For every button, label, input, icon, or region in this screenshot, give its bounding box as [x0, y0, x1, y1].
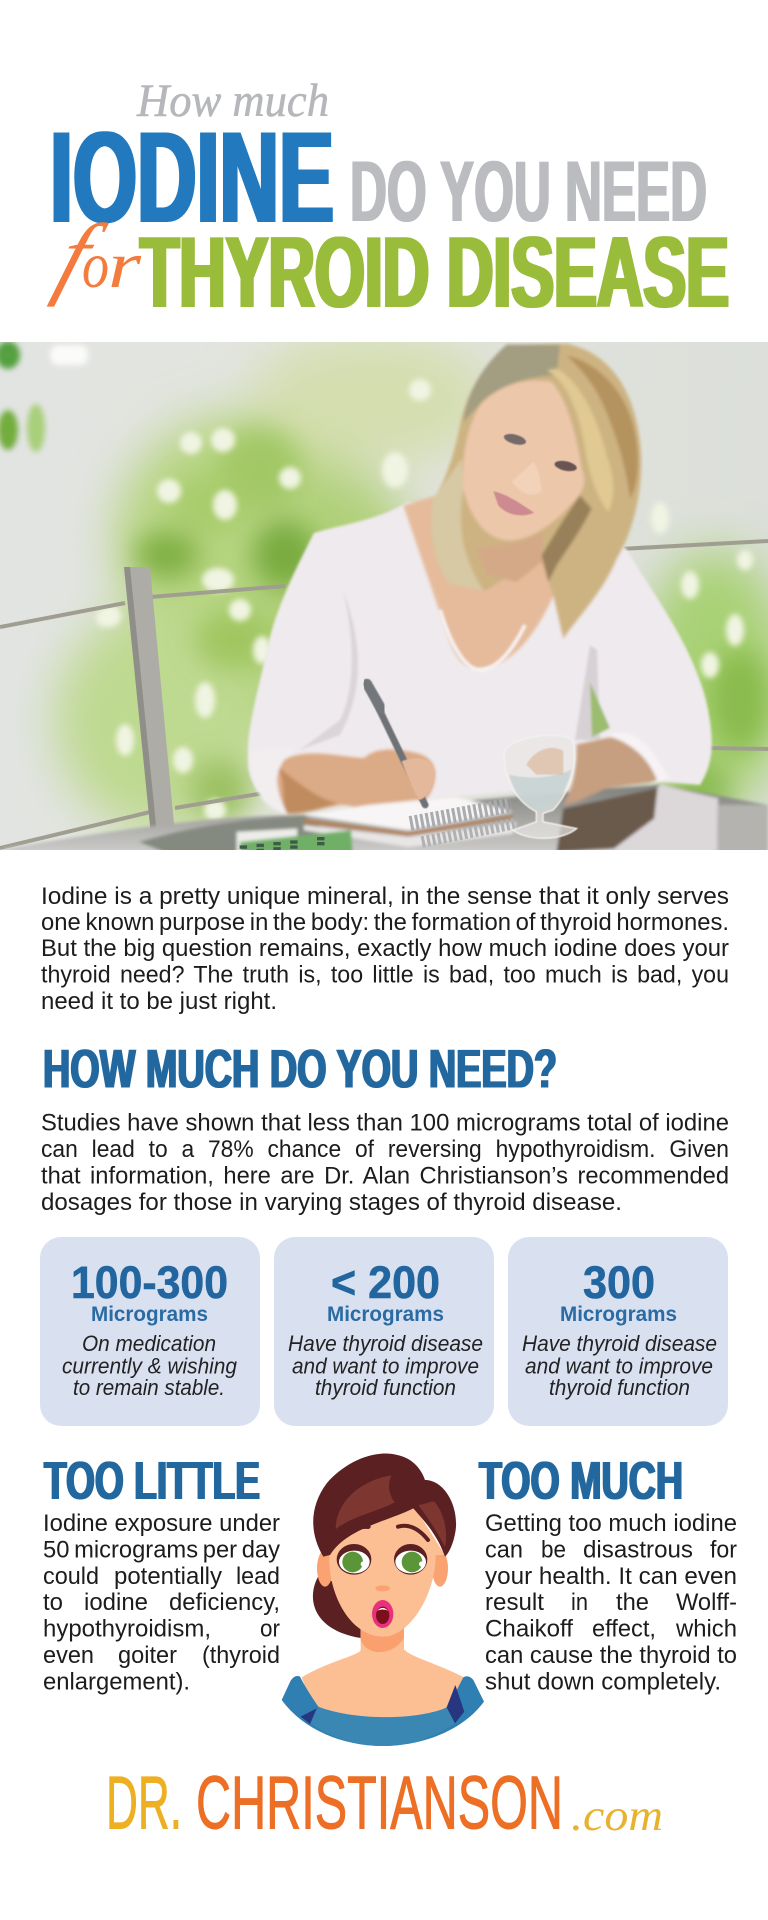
- studies paragraph: dosages for those in varying stages of thyroid disease.: [41, 1189, 622, 1216]
- left cuff: [253, 758, 288, 814]
- text block: too much: be: [541, 1536, 566, 1564]
- title line: How much: How much: [136, 75, 329, 127]
- woman: neckline trim: [440, 610, 525, 670]
- text block: too much: which: [675, 1616, 737, 1642]
- leaves top left: [0, 341, 88, 452]
- logo: DR. CHRISTIANSON.com: DR.: [106, 1760, 182, 1844]
- intro paragraph: Iodine is a pretty unique mineral, in the sense that it only serves: [41, 883, 729, 910]
- gap between body and sleeve: [590, 682, 610, 737]
- woman: shirt: [248, 502, 712, 812]
- text block: too much: can: [485, 1536, 523, 1564]
- panel: 100-300 micrograms: currently & wishing: [62, 1354, 237, 1378]
- panel: 300 micrograms: Micrograms: [560, 1303, 677, 1326]
- title word: for: f: [45, 206, 115, 307]
- railing: [0, 541, 768, 848]
- intro paragraph: [41, 883, 729, 1015]
- panel: less than 200 micrograms: thyroid function: [315, 1375, 456, 1400]
- panel: less than 200 micrograms: [274, 1237, 494, 1426]
- eyebrows: [338, 1527, 368, 1539]
- panel: 100-300 micrograms: 100-300: [71, 1257, 228, 1308]
- panel: 300 micrograms: thyroid function: [549, 1375, 690, 1400]
- mouth: [372, 1600, 393, 1628]
- panel: 300 micrograms: 300: [583, 1257, 655, 1308]
- text block: too little: hypothyroidism,: [43, 1616, 211, 1642]
- text block: too much: result: [485, 1589, 544, 1616]
- panel: 300 micrograms: Have thyroid disease: [522, 1331, 717, 1356]
- panel: 100-300 micrograms: On medication: [82, 1331, 216, 1356]
- panel: 300 micrograms: and want to improve: [525, 1354, 713, 1378]
- studies paragraph: that information, here are Dr. Alan Christianson’s recommended: [41, 1162, 729, 1190]
- text block: too much: can cause the thyroid to: [485, 1642, 737, 1669]
- text block: too little: potentially: [114, 1563, 223, 1590]
- text block: too little: iodine: [84, 1589, 148, 1616]
- text block: too much: [485, 1510, 737, 1696]
- text block: too little: enlargement).: [43, 1668, 190, 1696]
- text block: too much: Chaikoff: [485, 1616, 573, 1642]
- text block: too much: for: [710, 1536, 737, 1564]
- panel: less than 200 micrograms: and want to improve: [292, 1354, 479, 1378]
- foliage background: [55, 335, 768, 835]
- intro paragraph: need it to be just right.: [41, 988, 277, 1015]
- text block: too little: [43, 1510, 281, 1696]
- logo: DR. CHRISTIANSON.com: .com: [571, 1791, 663, 1840]
- text block: too little: 50 micrograms per day: [43, 1536, 281, 1564]
- text block: too little: or: [260, 1616, 280, 1642]
- text block: too little: to: [43, 1589, 63, 1616]
- text block: too much: disastrous: [583, 1536, 693, 1564]
- woman: arms, hands and table: [4, 684, 768, 855]
- hair: [313, 1454, 456, 1557]
- studies paragraph: can lead to a 78% chance of reversing hypothyroidism. Given: [41, 1136, 729, 1163]
- text block: too much: shut down completely.: [485, 1668, 721, 1696]
- text block: too much: effect,: [592, 1616, 656, 1642]
- text block: too little: even: [43, 1642, 94, 1669]
- text block: too little: (thyroid: [202, 1642, 280, 1669]
- text block: too little: goiter: [118, 1642, 177, 1669]
- face: [329, 1505, 445, 1637]
- logo: DR. CHRISTIANSON.com: CHRISTIANSON: [196, 1760, 563, 1844]
- railing post: [124, 567, 175, 835]
- photo: woman writing at a table: [0, 335, 768, 855]
- heading: too little: TOO LITTLE: [44, 1452, 260, 1511]
- calculator: [240, 830, 353, 853]
- panel: less than 200 micrograms: Have thyroid disease: [288, 1331, 483, 1356]
- woman: head, hair and chest: [403, 344, 641, 669]
- neck: [361, 1607, 404, 1652]
- pen: [367, 684, 425, 805]
- panel: 100-300 micrograms: to remain stable.: [73, 1375, 225, 1400]
- studies paragraph: Studies have shown that less than 100 micrograms total of iodine: [41, 1110, 729, 1136]
- panel: 100-300 micrograms: Micrograms: [91, 1303, 208, 1326]
- title word: for: o: [82, 229, 109, 302]
- right eye: [394, 1544, 427, 1575]
- panel: 300 micrograms: [508, 1237, 728, 1426]
- text block: too little: Iodine exposure under: [43, 1510, 280, 1537]
- text block: too much: in: [571, 1589, 588, 1616]
- text block: too little: lead: [236, 1563, 280, 1590]
- intro paragraph: thyroid need? The truth is, too little is bad, too much is bad, you: [41, 962, 729, 988]
- dress: [282, 1676, 484, 1746]
- title: [45, 75, 729, 329]
- right forearm and hand: [563, 736, 658, 805]
- water glass: [509, 747, 578, 840]
- panel: less than 200 micrograms: < 200: [331, 1257, 440, 1308]
- ears: [317, 1550, 333, 1587]
- panel: less than 200 micrograms: Micrograms: [327, 1303, 444, 1326]
- table: [4, 785, 768, 855]
- text block: too much: the: [616, 1589, 649, 1616]
- intro paragraph: one known purpose in the body: the formation of thyroid hormones.: [41, 909, 729, 936]
- text block: too much: Getting too much iodine: [485, 1510, 737, 1537]
- panel: 100-300 micrograms: [40, 1237, 260, 1426]
- studies paragraph: [41, 1110, 729, 1216]
- text block: too little: deficiency,: [169, 1589, 280, 1616]
- title word: IODINE: IODINE: [50, 104, 334, 250]
- title word: for: [45, 206, 141, 307]
- heading: too much: TOO MUCH: [479, 1452, 683, 1511]
- intro paragraph: But the big question remains, exactly how much iodine does your: [41, 935, 729, 962]
- fingers over pen: [402, 758, 435, 800]
- nose: [375, 1585, 390, 1591]
- text block: too much: your health. It can even: [485, 1563, 737, 1590]
- left forearm and hand: [277, 749, 435, 815]
- shoulders: [302, 1650, 464, 1722]
- bun: [313, 1573, 361, 1638]
- left eye: [337, 1544, 371, 1575]
- text block: too little: could: [43, 1563, 99, 1590]
- notebook: [304, 797, 513, 830]
- icon: surprised cartoon woman: [282, 1454, 484, 1746]
- title word: for: r: [108, 229, 141, 302]
- text block: too much: Wolff-: [676, 1589, 737, 1616]
